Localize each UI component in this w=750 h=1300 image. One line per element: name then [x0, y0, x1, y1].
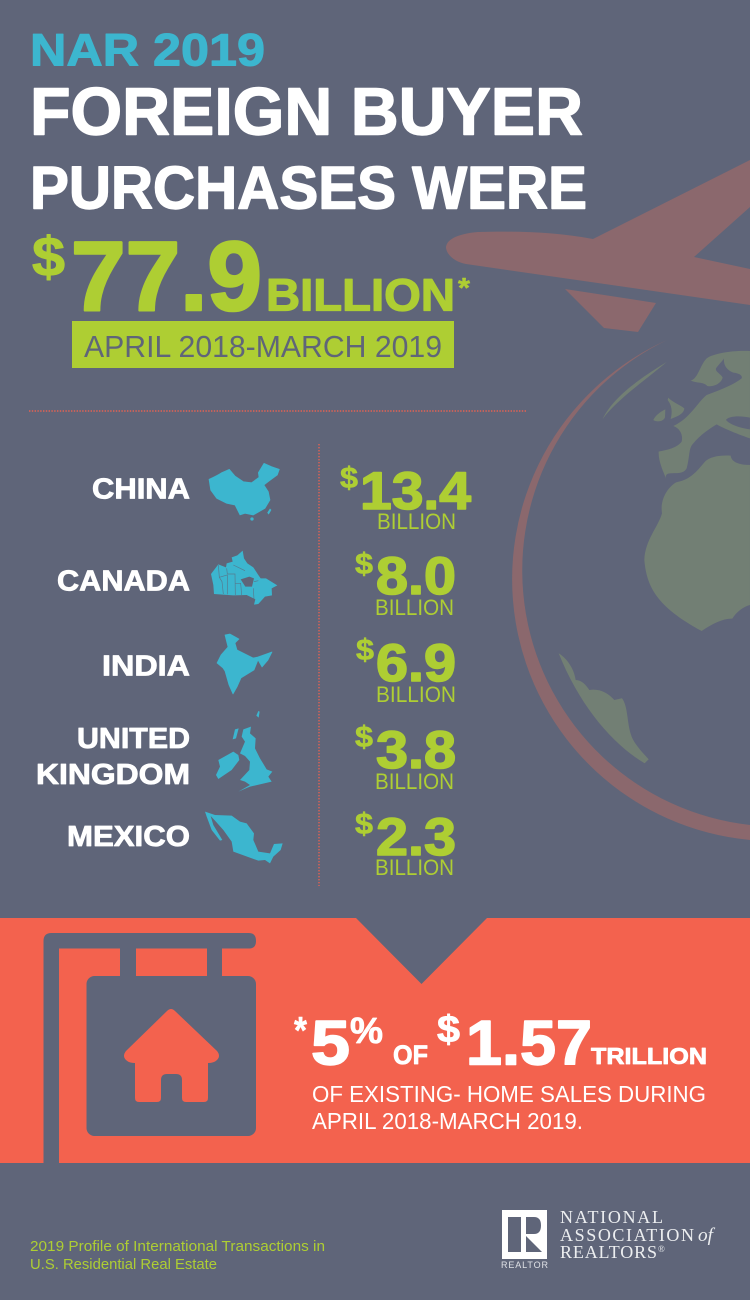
footnote text: [312, 1081, 706, 1134]
date banner: APRIL 2018-MARCH 2019: [84, 329, 442, 364]
icon: Canada map: [211, 551, 277, 605]
stat: 5% of $1.57 trillion: %: [350, 1010, 383, 1051]
icon: India map: [217, 634, 272, 694]
stat: 5% of $1.57 trillion: *: [294, 1010, 307, 1052]
country label: INDIA: [102, 650, 190, 682]
band with notch: [0, 918, 750, 1163]
amount: $: [355, 548, 373, 581]
illustration: airplane: [446, 160, 750, 332]
row: China: [92, 462, 472, 534]
logo mark: REALTOR: [501, 1260, 548, 1270]
logo wordmark: NATIONAL: [560, 1207, 663, 1227]
logo wordmark: ASSOCIATION: [560, 1225, 694, 1245]
logo wordmark: REALTORS: [560, 1242, 657, 1262]
headline figure: $77.9 billion: $: [32, 225, 65, 288]
country label: [36, 723, 190, 791]
row: China: 13.4: [360, 462, 472, 521]
row: India: 6.9: [376, 634, 456, 693]
row: United Kingdom: 3.8: [376, 721, 456, 780]
stat: 5% of $1.57 trillion: 5: [311, 1008, 350, 1078]
country label: KINGDOM: [36, 759, 190, 791]
row: Canada: [57, 547, 456, 620]
stat: 5% of $1.57 trillion: $: [437, 1009, 460, 1051]
icon: Mexico map: [205, 812, 283, 863]
country label: CANADA: [57, 566, 190, 598]
logo wordmark: of: [698, 1225, 716, 1246]
amount: $: [355, 721, 373, 754]
row: United Kingdom: BILLION: [375, 769, 454, 794]
row: Mexico: 2.3: [376, 808, 456, 867]
row: Canada: 8.0: [376, 547, 456, 606]
headline figure: $77.9 billion: BILLION: [266, 270, 455, 320]
heading: Foreign Buyer: FOREIGN BUYER: [30, 74, 583, 150]
globe rim crescent: [512, 340, 750, 840]
row: United Kingdom: [36, 711, 456, 794]
panel: footnote band: [0, 918, 750, 1163]
headline figure: $77.9 billion: *: [458, 272, 470, 303]
row: Canada: BILLION: [375, 595, 454, 620]
icon: hanging house sign: [44, 933, 256, 1163]
globe continents: [559, 351, 750, 763]
source note: 2019 Profile of International Transactions in: [30, 1239, 325, 1255]
stat: 5% of $1.57 trillion: [294, 1008, 707, 1078]
footnote text: OF EXISTING- HOME SALES DURING: [312, 1081, 706, 1107]
logo wordmark: ®: [658, 1244, 665, 1254]
stat: 5% of $1.57 trillion: TRILLION: [591, 1043, 707, 1069]
source note: [30, 1239, 325, 1273]
amount: $: [355, 808, 373, 841]
row: India: [102, 634, 456, 707]
row: China: BILLION: [377, 509, 456, 534]
stat: 5% of $1.57 trillion: 1.57: [466, 1008, 592, 1078]
logo wordmark: [560, 1207, 716, 1262]
country label: UNITED: [77, 723, 190, 755]
icon: China map: [209, 463, 279, 520]
source note: U.S. Residential Real Estate: [30, 1257, 217, 1273]
heading: Purchases Were: PURCHASES WERE: [30, 154, 587, 222]
headline figure: $77.9 billion: [32, 221, 470, 331]
logo mark: [501, 1210, 548, 1270]
logo: National Association of Realtors: [501, 1207, 716, 1270]
icon: UK map: [216, 711, 272, 792]
row: Mexico: BILLION: [375, 855, 454, 880]
stat: 5% of $1.57 trillion: OF: [393, 1040, 428, 1070]
row: India: BILLION: [376, 682, 456, 707]
country label: MEXICO: [67, 821, 190, 853]
heading: NAR 2019: NAR 2019: [30, 24, 265, 76]
country label: CHINA: [92, 474, 190, 506]
title: [30, 24, 587, 222]
headline figure: $77.9 billion: 77.9: [71, 221, 262, 331]
footnote text: APRIL 2018-MARCH 2019.: [312, 1108, 583, 1134]
illustration: globe: [512, 340, 750, 840]
amount: $: [356, 634, 374, 667]
row: Mexico: [67, 808, 456, 880]
amount: $: [340, 462, 358, 495]
